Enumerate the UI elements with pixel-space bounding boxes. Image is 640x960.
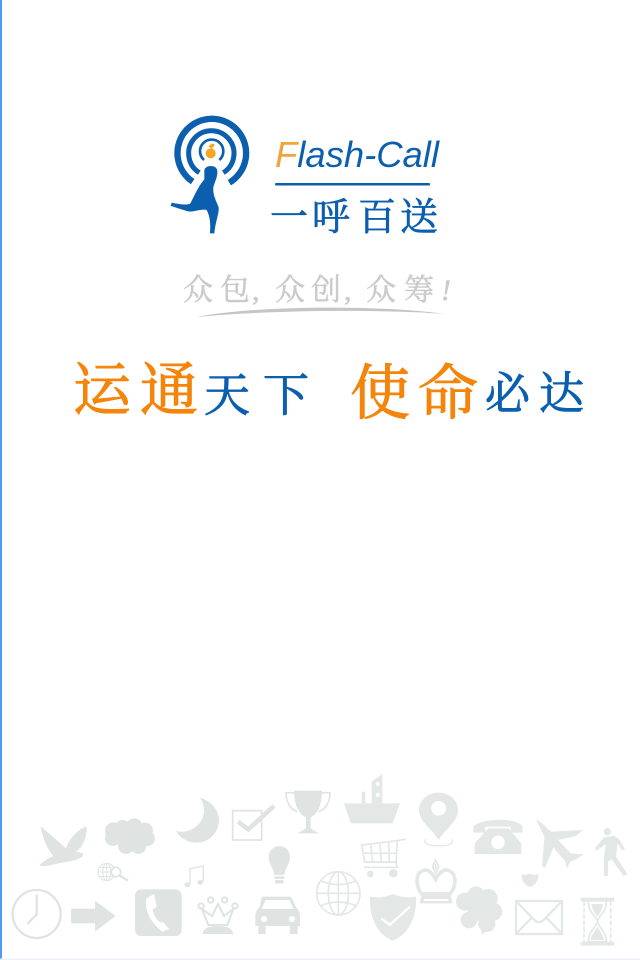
icon: world globe	[317, 872, 360, 915]
icon: small shield	[522, 873, 538, 887]
logo wordmark: 一呼百送: 百	[358, 197, 396, 239]
icon: arrow	[71, 901, 116, 932]
tagline underline swoosh	[196, 308, 446, 317]
tagline: 筹	[404, 274, 434, 307]
icon: clock	[13, 890, 61, 938]
logo divider	[275, 183, 430, 186]
icon band: right half	[317, 774, 627, 946]
tagline: 创	[311, 274, 341, 307]
icon: running figure with signal rings	[171, 119, 246, 233]
icon band: left half	[13, 791, 330, 938]
icon: envelope	[516, 901, 562, 934]
icon: hourglass	[581, 898, 614, 946]
icon: checkbox	[233, 806, 274, 840]
tagline	[183, 274, 451, 317]
logo wordmark: 一呼百送: 送	[400, 197, 438, 239]
slogan: 使命: 使	[350, 361, 410, 427]
slogan: 天下: 下	[263, 370, 309, 421]
icon: car	[255, 897, 300, 934]
icon: crescent moon	[176, 797, 219, 843]
icon: crown outline	[417, 860, 455, 903]
tagline: ,	[252, 274, 260, 307]
icon: dove	[39, 826, 87, 866]
tagline: 众	[275, 274, 305, 307]
icon: globe with magnifier	[98, 863, 128, 881]
icon: ship	[344, 774, 400, 823]
slogan: 使命: 命	[418, 361, 478, 427]
tagline: 众	[183, 274, 213, 307]
icon: telephone tile	[135, 889, 182, 936]
icon: cloud	[105, 818, 155, 854]
icon: trophy	[286, 791, 330, 833]
tagline: 众	[366, 274, 396, 307]
slogan: 运通: 运	[73, 358, 132, 423]
tagline: ,	[344, 274, 352, 307]
logo wordmark: 一呼百送: 呼	[312, 197, 350, 239]
icon: rotary telephone	[473, 820, 523, 854]
logo wordmark: Flash-Call: Flash-Call	[275, 134, 440, 175]
slogan: 运通: 通	[140, 358, 198, 423]
slogan: 必达: 达	[539, 369, 584, 419]
logo	[171, 119, 440, 239]
icon: airplane	[536, 819, 584, 869]
slogan: 必达: 必	[485, 369, 532, 419]
icon: shopping cart	[362, 839, 406, 878]
icon: crown	[198, 897, 238, 934]
icon: music note	[184, 866, 203, 887]
icon: light bulb	[269, 846, 290, 884]
icon: shield with check	[370, 894, 416, 941]
slogan	[73, 358, 584, 427]
tagline: !	[441, 274, 451, 307]
slogan: 天下: 天	[204, 370, 250, 421]
icon: four leaf clover	[456, 886, 502, 935]
icon: map pin	[419, 793, 458, 846]
logo wordmark: 一呼百送: 一	[270, 197, 308, 239]
tagline: 包	[220, 274, 250, 307]
icon: walking person	[595, 828, 627, 876]
